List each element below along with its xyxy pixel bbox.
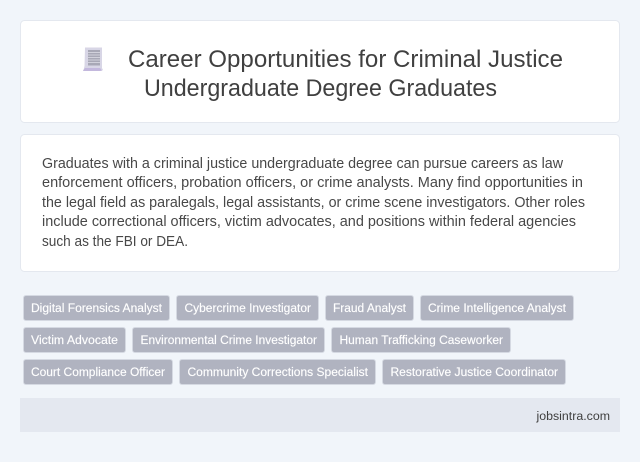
tag: Victim Advocate <box>24 328 126 352</box>
tag: Human Trafficking Caseworker: Human Trafficking Caseworker <box>340 333 503 347</box>
tag: Court Compliance Officer <box>24 360 172 384</box>
text block: summary <box>42 156 585 250</box>
tag: Fraud Analyst <box>326 296 414 320</box>
tag list <box>24 296 574 384</box>
title: Undergraduate Degree Graduates <box>144 75 497 102</box>
footer bar <box>20 398 620 432</box>
icon: document scroll <box>83 48 103 71</box>
tag: Cybercrime Investigator: Cybercrime Investigator <box>184 301 311 315</box>
tag: Crime Intelligence Analyst <box>420 296 574 320</box>
tag: Victim Advocate: Victim Advocate <box>31 333 118 347</box>
tag: Cybercrime Investigator <box>176 296 318 320</box>
tag: Environmental Crime Investigator <box>132 328 324 352</box>
tag: Human Trafficking Caseworker <box>332 328 510 352</box>
tag: Community Corrections Specialist: Community Corrections Specialist <box>188 365 369 379</box>
tag: Community Corrections Specialist <box>180 360 376 384</box>
panel: header <box>20 20 620 122</box>
footer source text: jobsintra.com <box>536 409 610 423</box>
text block: summary: such as the FBI or DEA. <box>42 234 188 250</box>
tag: Environmental Crime Investigator: Environmental Crime Investigator <box>140 333 317 347</box>
title <box>128 46 563 102</box>
tag: Digital Forensics Analyst: Digital Forensics Analyst <box>31 301 163 315</box>
tag: Restorative Justice Coordinator <box>382 360 566 384</box>
tag: Restorative Justice Coordinator: Restorative Justice Coordinator <box>390 365 558 379</box>
panel: description <box>20 134 620 272</box>
title: Career Opportunities for Criminal Justice <box>128 46 563 73</box>
text block: summary: the legal field as paralegals, legal assistants, or crime scene investigators. Other roles <box>42 195 585 211</box>
tag: Digital Forensics Analyst <box>24 296 170 320</box>
tag: Fraud Analyst: Fraud Analyst <box>333 301 407 315</box>
tag: Court Compliance Officer: Court Compliance Officer <box>31 365 165 379</box>
tag: Crime Intelligence Analyst: Crime Intelligence Analyst <box>428 301 567 315</box>
text block: summary: Graduates with a criminal justice undergraduate degree can pursue careers as law <box>42 156 564 172</box>
text block: summary: include correctional officers, victim advocates, and positions within federal agencies <box>42 214 576 230</box>
text block: summary: enforcement officers, probation officers, or crime analysts. Many find opportunities in <box>42 175 583 191</box>
